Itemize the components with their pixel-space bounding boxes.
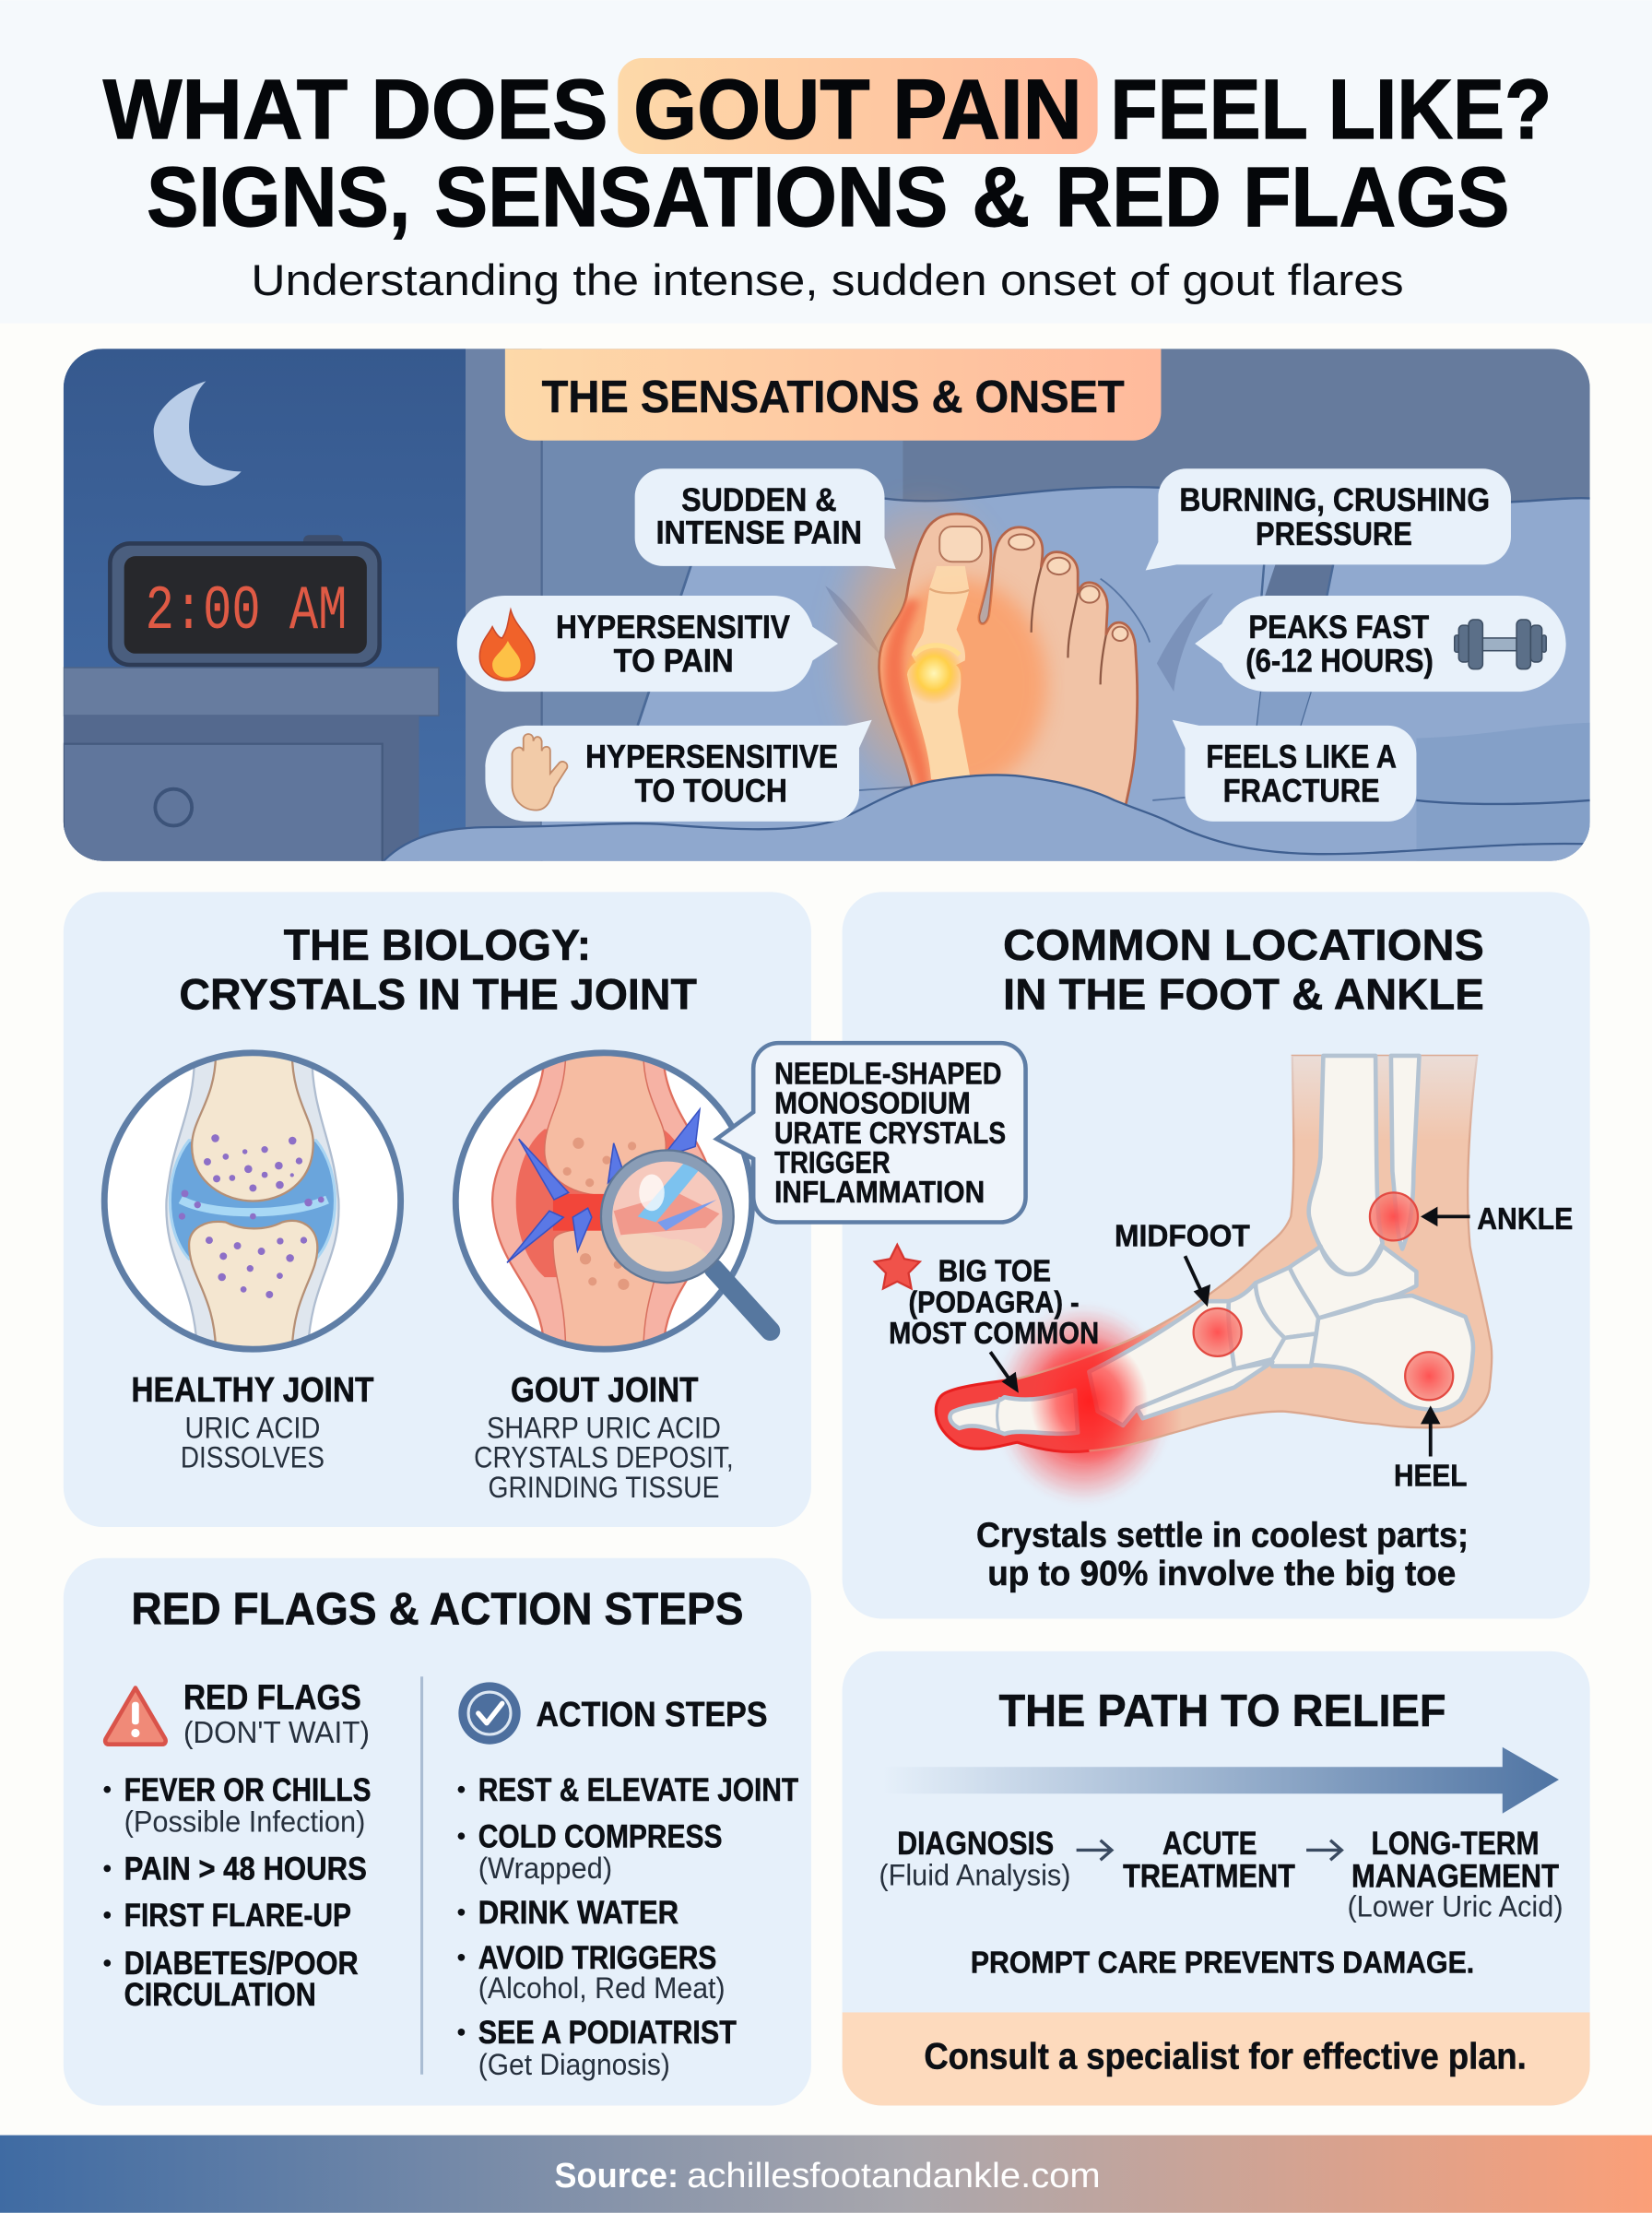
label: big toe: BIG TOE [938,1255,1051,1289]
step: long-term management: MANAGEMENT [1351,1858,1559,1894]
foot illustration [822,487,1138,811]
magnifying glass [601,1150,771,1331]
locations heading [1003,921,1484,1019]
icon: check circle [458,1682,521,1745]
nightstand [64,668,439,870]
caption: gout joint: CRYSTALS DEPOSIT, [474,1441,734,1474]
tibia [1309,1056,1383,1274]
arrow: treatment to management [1306,1840,1341,1860]
red flags heading: RED FLAGS & ACTION STEPS [131,1585,743,1635]
red flags list: FIRST FLARE-UP [124,1898,351,1934]
consult strip [843,2012,1590,2105]
action steps list: ACTION STEPS [537,1695,767,1734]
gradient arrow [881,1747,1559,1814]
title: WHAT DOES [103,63,608,157]
cuboid [1269,1333,1316,1367]
alarm clock: 2:00 AM [146,577,347,647]
callout: needle-shaped crystals: TRIGGER [774,1146,891,1180]
heading tab: THE SENSATIONS & ONSET [542,373,1125,422]
label: heel [1394,1405,1468,1494]
biology heading [179,921,697,1019]
footer source bar: achillesfootandankle.com [687,2156,1101,2195]
bubble: feels like a fracture: FEELS LIKE A [1206,740,1397,775]
red flags list: (DON'T WAIT) [183,1716,370,1750]
caption: healthy joint: URIC ACID [184,1412,320,1445]
panel: sensations and onset [64,349,1590,875]
caption: gout joint [474,1370,734,1504]
label: ankle: ANKLE [1477,1202,1573,1237]
footer source bar: Source: [554,2156,678,2195]
bubble: hypersensitive to touch: TO TOUCH [635,773,787,809]
icon: dumbbell [1455,620,1546,669]
step: acute treatment [1123,1826,1295,1894]
action steps list: (Wrapped) [478,1852,612,1885]
rear blanket [542,487,1590,861]
locations caption [976,1515,1469,1593]
caption: gout joint: SHARP URIC ACID [487,1412,721,1445]
locations caption: Crystals settle in coolest parts; [976,1515,1469,1555]
alarm clock [110,535,380,665]
title: GOUT PAIN [633,63,1082,157]
label: big toe [875,1245,1099,1393]
callout: needle-shaped crystals: INFLAMMATION [774,1176,985,1210]
red flags list: RED FLAGS [183,1677,361,1717]
icon: flame [479,609,535,680]
caption: healthy joint: DISSOLVES [181,1441,324,1474]
caption: gout joint: GRINDING TISSUE [488,1471,719,1504]
label: ankle [1421,1202,1573,1237]
action steps list: DRINK WATER [478,1895,678,1931]
blanket [382,774,1584,861]
biology heading: THE BIOLOGY: [284,921,591,970]
title: FEEL LIKE? [1110,63,1552,157]
action steps list: REST & ELEVATE JOINT [478,1772,799,1808]
step: acute treatment: ACUTE [1162,1826,1257,1862]
caption: healthy joint: HEALTHY JOINT [131,1370,374,1410]
bubble: sudden and intense pain: SUDDEN & [681,482,836,518]
step: acute treatment: TREATMENT [1123,1858,1295,1894]
bubble: burning crushing pressure: PRESSURE [1256,516,1412,552]
panel: red flags and action steps [64,1558,811,2105]
metatarsals [1089,1301,1234,1426]
header band [0,0,1652,324]
icon: hand [513,734,567,811]
bubble: hypersensitive to touch: HYPERSENSITIVE [585,740,838,775]
callout: needle-shaped crystals [716,1043,1026,1222]
step: diagnosis: DIAGNOSIS [897,1826,1054,1862]
illustration: healthy joint [104,1051,401,1355]
heading tab [505,349,1161,441]
fibula [1391,1056,1419,1249]
bubble: hypersensitive to pain: TO PAIN [614,644,734,680]
label: big toe: (PODAGRA) - [909,1285,1080,1320]
label: midfoot [1115,1220,1250,1307]
red flags list: PAIN > 48 HOURS [124,1852,367,1888]
illustration: gout joint [131,1051,771,1504]
panel: common locations [843,892,1590,1619]
bubble: peaks fast: PEAKS FAST [1248,609,1430,645]
crystals [507,1109,700,1262]
caption: healthy joint [131,1370,374,1474]
bubble: peaks fast [1195,596,1566,692]
bubble: burning crushing pressure [1146,468,1511,570]
step: long-term management: (Lower Uric Acid) [1347,1889,1564,1923]
step: diagnosis [879,1826,1071,1892]
locations heading: COMMON LOCATIONS [1003,921,1484,970]
red flags list [103,1677,371,2013]
red flags list: (Possible Infection) [124,1805,365,1839]
biology heading: CRYSTALS IN THE JOINT [179,970,697,1019]
cuneiform [1229,1283,1284,1369]
footer source bar [0,2136,1652,2213]
panel: path to relief [843,1651,1590,2105]
bubble: feels like a fracture [1173,720,1416,822]
subtitle: Understanding the intense, sudden onset of gout flares [251,256,1404,305]
title: SENSATIONS [434,150,948,244]
locations heading: IN THE FOOT & ANKLE [1003,970,1484,1019]
arrow: diagnosis to treatment [1077,1840,1112,1860]
relief heading: THE PATH TO RELIEF [998,1686,1446,1736]
action steps list: COLD COMPRESS [478,1818,723,1854]
panel: the biology [0,892,1652,2213]
label: midfoot: MIDFOOT [1115,1220,1250,1254]
bubble: burning crushing pressure: BURNING, CRUSHING [1179,482,1490,518]
action steps list: SEE A PODIATRIST [478,2015,737,2051]
action steps list [458,1695,799,2081]
talus [1290,1247,1416,1319]
title: SIGNS, [147,150,410,244]
step: long-term management [1347,1826,1564,1923]
title [103,63,1552,244]
prompt care note: PROMPT CARE PREVENTS DAMAGE. [971,1947,1474,1981]
callout: needle-shaped crystals: MONOSODIUM [774,1087,971,1121]
consult strip: Consult a specialist for effective plan. [924,2037,1527,2077]
calcaneus [1311,1296,1473,1410]
step: long-term management: LONG-TERM [1371,1826,1540,1862]
icon: moon [154,381,242,486]
icon: warning triangle [105,1687,166,1745]
bubble: hypersensitive to touch [485,720,872,822]
bubble: hypersensitive to pain: HYPERSENSITIV [556,609,790,645]
locations caption: up to 90% involve the big toe [987,1554,1456,1593]
action steps list: (Alcohol, Red Meat) [478,1971,726,2005]
action steps list: AVOID TRIGGERS [478,1940,716,1976]
red flags list: CIRCULATION [124,1977,316,2013]
bubble: sudden and intense pain: INTENSE PAIN [656,515,862,550]
step: diagnosis: (Fluid Analysis) [879,1859,1071,1892]
foot anatomy illustration [936,1056,1492,1503]
red flags list: FEVER OR CHILLS [124,1772,371,1808]
action steps list: (Get Diagnosis) [478,2048,670,2081]
bubble: feels like a fracture: FRACTURE [1223,773,1380,809]
title: & [972,150,1030,244]
bubble: hypersensitive to pain [457,596,838,692]
caption: gout joint: GOUT JOINT [511,1370,699,1410]
bubble: sudden and intense pain [635,468,896,569]
callout: needle-shaped crystals: URATE CRYSTALS [774,1117,1006,1151]
label: big toe: MOST COMMON [889,1317,1099,1351]
title highlight [618,58,1098,154]
inflamed spots [1370,1192,1418,1240]
label: heel: HEEL [1394,1460,1468,1494]
big toe bones [950,1391,1078,1434]
callout: needle-shaped crystals: NEEDLE-SHAPED [774,1058,1002,1092]
bubble: peaks fast: (6-12 HOURS) [1245,644,1434,680]
navicular [1256,1267,1318,1338]
red flags list: DIABETES/POOR [124,1946,359,1982]
title: RED FLAGS [1056,150,1509,244]
